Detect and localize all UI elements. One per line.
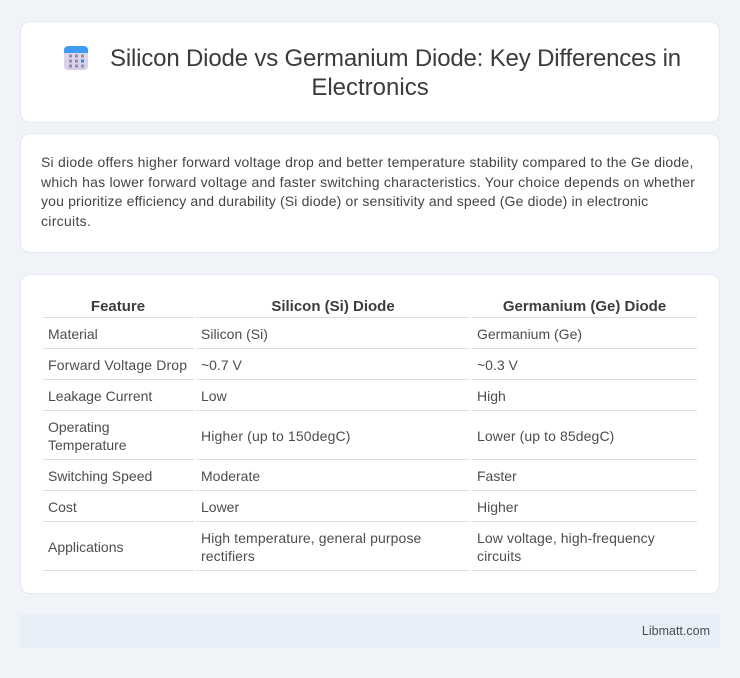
comparison table: Forward Voltage Drop bbox=[48, 357, 187, 373]
comparison table: Silicon (Si) bbox=[201, 326, 268, 342]
comparison table: High bbox=[477, 388, 506, 404]
footer bar bbox=[20, 614, 720, 648]
comparison table: ~0.7 V bbox=[201, 357, 242, 373]
icon: calendar bbox=[64, 46, 88, 70]
comparison table: Cost bbox=[48, 499, 77, 515]
title: Electronics bbox=[311, 74, 429, 101]
footer credit: Libmatt.com bbox=[642, 624, 710, 638]
title: Silicon Diode vs Germanium Diode: Key Differences in bbox=[110, 45, 681, 72]
comparison table: Higher (up to 150degC) bbox=[201, 428, 351, 444]
comparison table: Leakage Current bbox=[48, 388, 152, 404]
summary text: Si diode offers higher forward voltage drop and better temperature stability compared to the Ge diode, bbox=[41, 154, 694, 170]
comparison table: Applications bbox=[48, 539, 124, 555]
comparison table: rectifiers bbox=[201, 548, 255, 564]
comparison table: ~0.3 V bbox=[477, 357, 518, 373]
comparison table: Higher bbox=[477, 499, 518, 515]
comparison table: Faster bbox=[477, 468, 517, 484]
summary text: which has lower forward voltage and faster switching characteristics. Your choice depends on whether bbox=[41, 174, 695, 190]
comparison table: Lower (up to 85degC) bbox=[477, 428, 614, 444]
comparison table: Low bbox=[201, 388, 227, 404]
table header: Germanium (Ge) Diode bbox=[503, 298, 666, 315]
comparison table: circuits bbox=[477, 548, 521, 564]
comparison table: Lower bbox=[201, 499, 239, 515]
summary text: circuits. bbox=[41, 213, 91, 229]
table header bbox=[91, 298, 666, 315]
comparison table: Temperature bbox=[48, 437, 127, 453]
summary text: you prioritize efficiency and durability (Si diode) or sensitivity and speed (Ge diode) in electronic bbox=[41, 193, 648, 209]
panel: comparison table card bbox=[20, 274, 720, 594]
title bbox=[110, 45, 681, 101]
summary text bbox=[41, 154, 695, 229]
table header: Feature bbox=[91, 298, 145, 315]
panel: summary card bbox=[20, 133, 720, 253]
panel: title card bbox=[20, 21, 720, 123]
table header: Silicon (Si) Diode bbox=[271, 298, 395, 315]
comparison table: Moderate bbox=[201, 468, 260, 484]
comparison table: High temperature, general purpose bbox=[201, 530, 421, 546]
comparison table: Germanium (Ge) bbox=[477, 326, 582, 342]
comparison table: Low voltage, high-frequency bbox=[477, 530, 655, 546]
comparison table: Switching Speed bbox=[48, 468, 152, 484]
comparison table: Material bbox=[48, 326, 98, 342]
comparison table: Operating bbox=[48, 419, 109, 435]
comparison table bbox=[43, 298, 697, 571]
